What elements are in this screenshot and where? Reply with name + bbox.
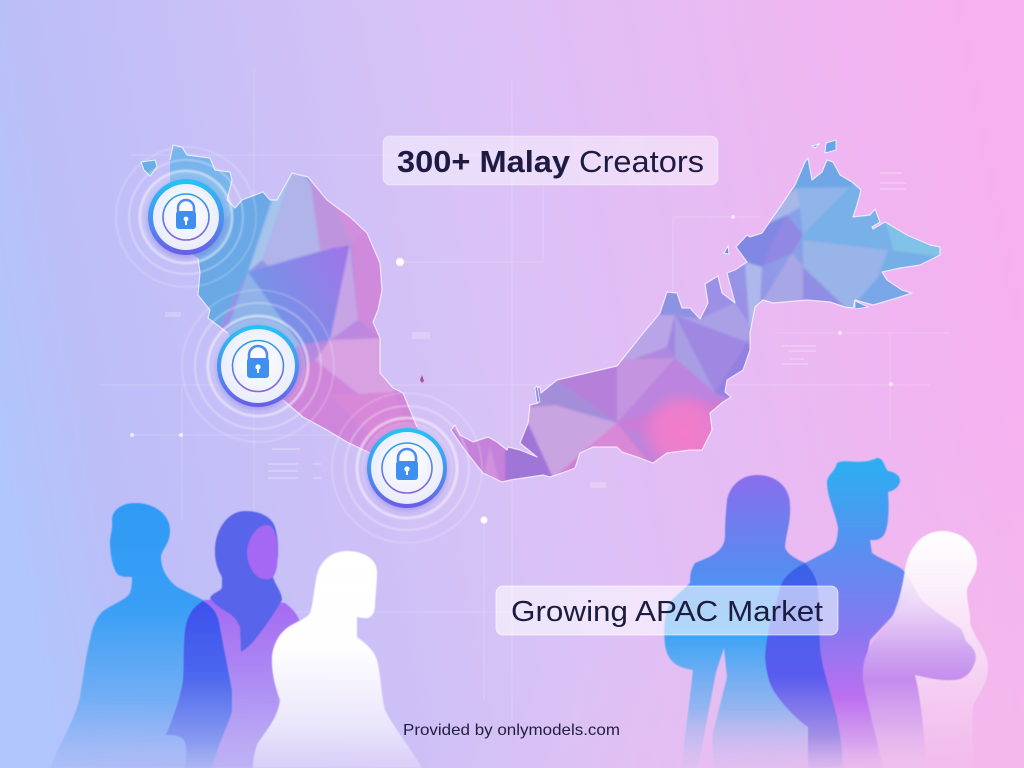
silhouette: man in blue — [50, 503, 232, 768]
silhouette: woman in hijab body — [203, 596, 300, 768]
crossed arm, purple — [863, 572, 976, 768]
connector node dots — [130, 215, 893, 524]
map: Sarawak and Sabah — [420, 140, 955, 500]
map: Peninsular Malaysia — [140, 144, 418, 454]
location badge: lock 3 — [332, 393, 482, 543]
label: 300+ Malay Creators — [383, 136, 718, 185]
label: 300+ Malay Creators: 300+ Malay Creators — [397, 144, 704, 179]
hijab face — [247, 525, 277, 579]
silhouette: woman, violet to blue — [664, 475, 845, 768]
overlap of two bodies — [765, 563, 842, 768]
map: Malaysia polygon — [141, 130, 955, 500]
location badge: lock 2 — [182, 290, 334, 442]
location badge: lock 1 — [116, 147, 256, 287]
hijab — [210, 511, 282, 652]
label: Growing APAC Market: Growing APAC Market — [511, 596, 823, 628]
silhouette: man with quiff — [765, 458, 915, 768]
silhouette: person in white — [253, 551, 422, 768]
silhouette: person in white — [863, 531, 988, 768]
people group: left — [50, 503, 422, 768]
footer credit: Provided by onlymodels.com — [403, 722, 620, 739]
people group: right — [664, 458, 988, 768]
overlap of blue and purple bodies — [166, 601, 232, 768]
label: Growing APAC Market — [496, 586, 838, 635]
